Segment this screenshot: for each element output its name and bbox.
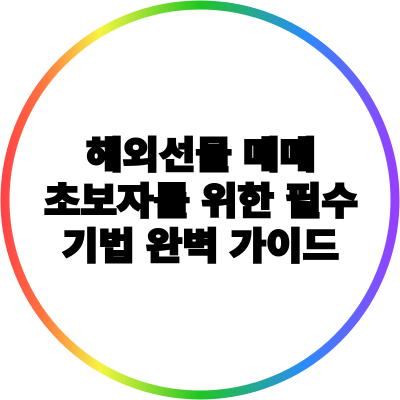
title line 1: 해외선물 매매: [86, 135, 316, 176]
title line 2: 초보자를 위한 필수: [44, 181, 358, 222]
title line 3: 기법 완벽 가이드: [62, 226, 339, 267]
title: [44, 135, 358, 267]
